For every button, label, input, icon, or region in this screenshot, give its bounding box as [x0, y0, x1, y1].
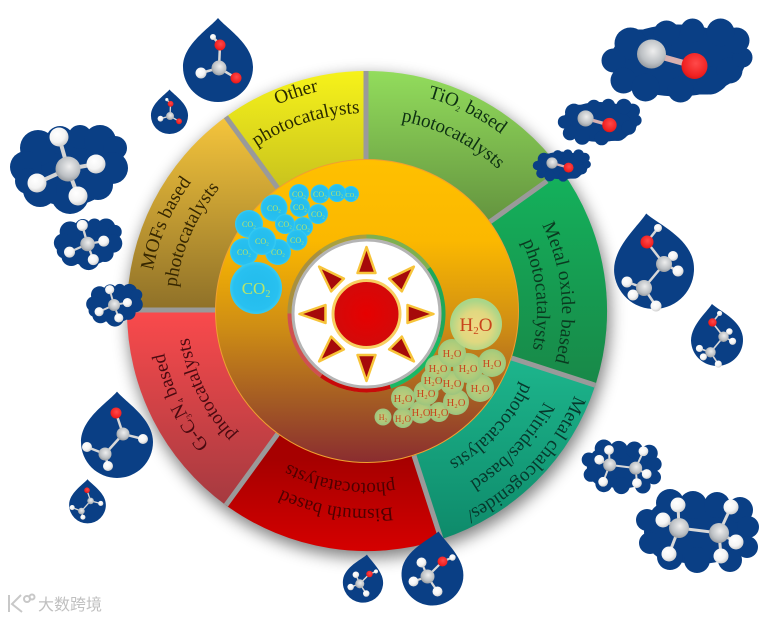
drop: methanol small: [340, 552, 387, 605]
CO2 bubble cluster: CO₂: [292, 190, 306, 199]
large H2O bubble: H: [460, 315, 473, 336]
cloud: methane small: [86, 284, 143, 327]
label: G-C3N4 based photocatalysts: photocatalysts: [180, 338, 240, 440]
segment: TiO2 based photocatalysts: [367, 71, 561, 311]
icon: watermark logo: [9, 594, 34, 612]
segment: Metal oxide based photocatalysts: [367, 170, 607, 385]
cloud: ethane large: [636, 489, 759, 573]
H2O bubble cluster: H₂O: [412, 408, 431, 419]
label: TiO2 based photocatalysts: based: [465, 99, 508, 134]
H2O bubble cluster: H₂O: [471, 384, 490, 395]
drop: formic acid small: [151, 90, 188, 134]
cloud: methane medium: [54, 218, 122, 270]
H2O bubble cluster: H₂O: [424, 376, 443, 387]
CO2 bubble cluster: CO₂: [267, 204, 281, 213]
CO2 bubble cluster: CO₂: [331, 190, 344, 198]
label: Metal oxide based photocatalysts: photocatalysts: [518, 238, 550, 350]
label: Metal chalcogenides/Nitrides based photocatalysts: Nitrides/based: [470, 402, 555, 492]
label: G-C3N4 based photocatalysts: N: [170, 404, 188, 420]
H2O bubble cluster: H₂O: [459, 364, 478, 375]
segment: MOFs based photocatalysts: [127, 117, 367, 311]
label: TiO2 based photocatalysts: 2: [455, 106, 460, 112]
drop: methanol large: [397, 527, 469, 610]
watermark text: 大数跨境: [38, 595, 102, 614]
large CO2 bubble: CO: [242, 279, 265, 298]
CO2 bubble cluster: CO₂: [278, 220, 292, 229]
watermark: [9, 594, 102, 614]
H2O bubble cluster: H₂O: [417, 389, 436, 400]
large H2O bubble: 2: [473, 325, 479, 337]
label: Metal chalcogenides/Nitrides based photocatalysts: photocatalysts: [450, 380, 530, 468]
label: Bismuth based photocatalysts: [278, 464, 396, 522]
cloud: ethane medium: [582, 440, 662, 494]
label: MOFs based photocatalysts: photocatalysts: [164, 183, 218, 288]
cloud: carbon monoxide medium: [558, 99, 642, 145]
drop: ethanol large: [607, 208, 699, 314]
centre sun disc: [289, 236, 444, 390]
CO2 bubble cluster: [230, 184, 359, 314]
label: TiO2 based photocatalysts: photocatalysts: [400, 110, 503, 168]
segment: Bismuth based photocatalysts: [226, 311, 441, 551]
label: MOFs based photocatalysts: MOFs based: [140, 175, 192, 270]
CO2 bubble cluster: CO₂: [293, 203, 307, 212]
large H2O bubble: [450, 298, 502, 350]
icon: sun rays: [300, 247, 434, 381]
CO2 bubble cluster: CO₂: [255, 237, 269, 246]
cloud: carbon monoxide small: [533, 149, 591, 182]
large CO2 bubble: 2: [265, 289, 270, 300]
H2O bubble cluster: H₂O: [429, 364, 448, 375]
drop: acetaldehyde small: [69, 479, 106, 523]
drop: acetaldehyde large: [81, 392, 153, 478]
H2O bubble cluster: H₂: [379, 413, 387, 422]
cloud: methane large: [10, 125, 128, 214]
label: G-C3N4 based photocatalysts: 3: [186, 414, 192, 419]
H2O bubble cluster: H₂O: [443, 379, 462, 390]
H2O bubble cluster: H₂O: [447, 398, 466, 409]
label: G-C3N4 based photocatalysts: 4: [178, 398, 183, 402]
segment: G-C3N4 based photocatalysts: [127, 311, 367, 505]
CO2 bubble cluster: CO₂: [313, 190, 327, 199]
CO2 bubble cluster: CO₂: [311, 210, 325, 219]
segment: Other photocatalysts: [226, 71, 367, 311]
inner gradient ring: [216, 160, 518, 462]
label: G-C3N4 based photocatalysts: G-C: [180, 419, 206, 450]
CO2 bubble cluster: CO₂: [345, 192, 357, 199]
H2O bubble cluster: [374, 298, 506, 428]
large H2O bubble: O: [479, 315, 492, 336]
icon: sun core: [333, 280, 400, 348]
H2O bubble cluster: H₂O: [430, 408, 449, 419]
label: Metal oxide based photocatalysts: [518, 220, 576, 364]
large CO2 bubble: [230, 262, 282, 314]
H2O bubble cluster: H₂O: [394, 394, 413, 405]
CO2 bubble cluster: CO₂: [271, 248, 285, 257]
H2O bubble cluster: H₂O: [395, 414, 412, 424]
coloured ring arcs: [289, 236, 444, 390]
CO2 bubble cluster: CO₂: [242, 220, 256, 229]
H2O bubble cluster: H₂O: [443, 349, 462, 360]
label: MOFs based photocatalysts: [140, 175, 218, 288]
photocatalyst wheel: [127, 71, 607, 551]
cloud: carbon monoxide large: [602, 18, 752, 102]
H2O bubble cluster: H₂O: [483, 359, 502, 370]
drop: ethanol small: [686, 300, 746, 369]
label: Bismuth based photocatalysts: photocatalysts: [286, 464, 396, 496]
label: G-C3N4 based photocatalysts: based: [152, 353, 177, 400]
label: Other photocatalysts: photocatalysts: [252, 103, 359, 150]
drop: formic acid large: [183, 18, 253, 102]
label: TiO2 based photocatalysts: TiO: [430, 86, 458, 106]
CO2 bubble cluster: CO₂: [296, 223, 310, 232]
CO2 bubble cluster: CO₂: [290, 236, 304, 245]
label: Other photocatalysts: Other: [274, 82, 317, 103]
CO2 bubble cluster: CO₂: [237, 248, 251, 257]
outer wheel shadow: [128, 76, 610, 558]
segment: Metal chalcogenides/Nitrides based photocatalysts: [367, 311, 595, 539]
label: Metal chalcogenides/Nitrides based photocatalysts: Metal chalcogenides/: [469, 396, 586, 524]
label: Metal oxide based photocatalysts: Metal oxide based: [542, 220, 576, 364]
label: Bismuth based photocatalysts: Bismuth based: [278, 490, 394, 522]
